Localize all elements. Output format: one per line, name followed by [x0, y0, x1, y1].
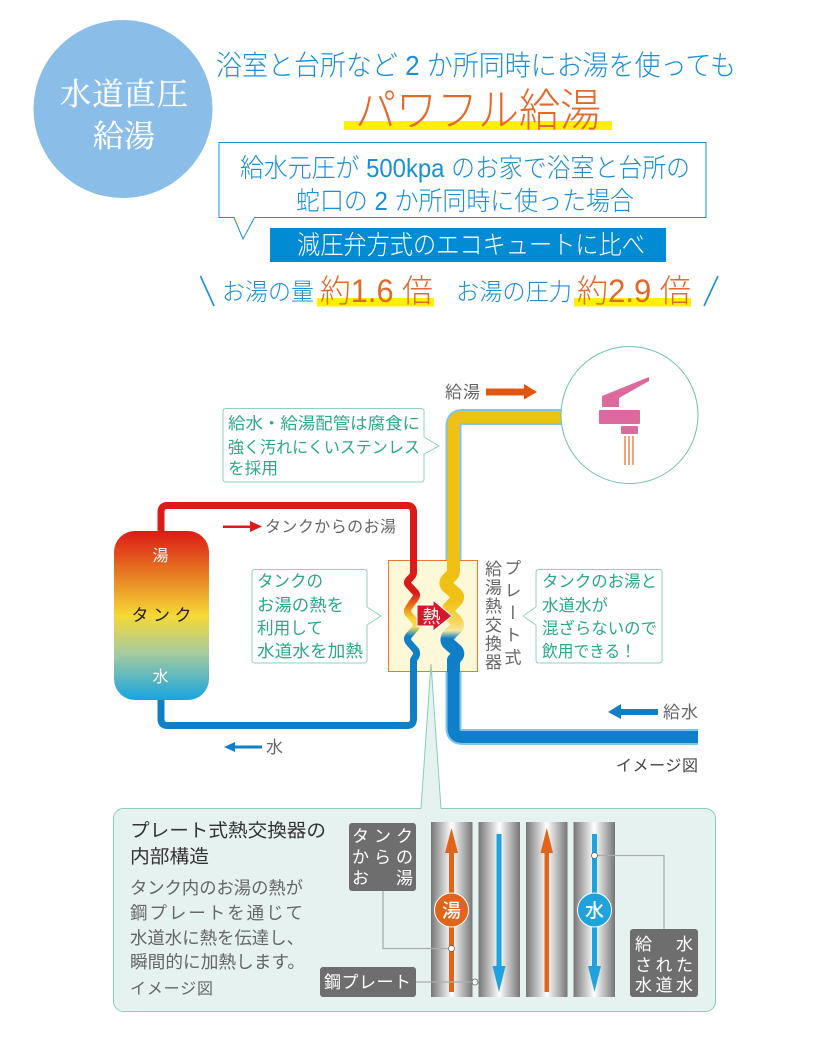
label: プレート式給湯熱交換器	[482, 559, 521, 672]
panel description: 水道水に熱を伝達し、	[130, 928, 304, 948]
panel: plate heat exchanger internals	[114, 664, 716, 1012]
callout: stainless pipes: を採用	[228, 459, 278, 478]
tag: 給水された水道水: 水道水	[635, 976, 693, 995]
leader dots	[448, 852, 598, 985]
marker: 水	[578, 893, 612, 927]
callout: drinkable	[523, 570, 662, 663]
callout: stainless pipes	[223, 408, 439, 482]
panel description: タンク内のお湯の熱が	[130, 878, 303, 898]
tag: タンクからのお湯	[349, 823, 416, 891]
tank: 湯	[152, 547, 169, 565]
callout: tank heat	[252, 570, 381, 663]
marker: 湯: 湯	[442, 900, 461, 922]
arrow: hot up 1	[445, 828, 458, 992]
arrow: hot up 2	[540, 828, 553, 992]
tag: 給水された水道水	[630, 929, 698, 997]
tag: 鋼プレート: 鋼プレート	[324, 973, 411, 992]
panel description: 鋼プレートを通じて	[130, 903, 303, 923]
arrow: water down 1	[492, 834, 506, 992]
label: プレート式給湯熱交換器: プレート式	[502, 559, 521, 671]
arrow: water down 2	[588, 834, 601, 992]
panel heading: 内部構造	[130, 846, 209, 867]
badge: 水道直圧給湯: 水道直圧	[60, 77, 188, 112]
tank: 水	[152, 668, 169, 686]
tag: 鋼プレート	[320, 967, 416, 997]
callout: drinkable: 混ざらないので	[542, 618, 657, 638]
leader lines	[383, 856, 664, 982]
pipe: blue supply water	[454, 672, 698, 737]
pipe: blue water to tank	[161, 670, 414, 726]
callout: stainless pipes: 給水・給湯配管は腐食に	[228, 414, 420, 433]
banner: comparison: 減圧弁方式のエコキュートに比べ	[297, 230, 645, 260]
label: 水 with arrow: 水	[266, 738, 283, 757]
pipe: hot supply to faucet	[454, 417, 570, 562]
panel description	[130, 878, 305, 998]
tag: タンクからのお湯: お 湯	[352, 869, 413, 888]
label: 給湯 with arrow	[445, 383, 537, 402]
callout: tank heat: 水道水を加熱	[257, 642, 363, 661]
tag: 給水された水道水: された	[635, 956, 693, 975]
label: 水 with arrow	[224, 738, 283, 757]
tank: タンク	[132, 606, 192, 625]
callout: drinkable: タンクのお湯と	[542, 572, 657, 591]
callout: tank heat: お湯の熱を	[257, 596, 344, 615]
tag: 給水された水道水: 給 水	[635, 935, 693, 954]
heading: パワフル給湯: パワフル給湯	[355, 85, 601, 136]
callout: drinkable: 飲用できる！	[542, 642, 636, 661]
heat exchanger: 熱	[422, 607, 440, 627]
result: hot water amount and pressure: お湯の量	[222, 279, 314, 306]
panel heading	[130, 820, 326, 867]
pipe: red hot water from tank	[161, 506, 414, 562]
caption: イメージ図: イメージ図	[616, 758, 698, 775]
result: hot water amount and pressure: 約1.6 倍	[320, 273, 433, 309]
result: hot water amount and pressure: 約2.9 倍	[577, 273, 691, 309]
tag: タンクからのお湯: タンク	[352, 827, 413, 846]
label: 給湯 with arrow: 給湯	[445, 383, 480, 402]
label: 給水 with arrow: 給水	[663, 703, 698, 722]
badge: 水道直圧給湯: 給湯	[93, 119, 155, 154]
label: プレート式給湯熱交換器: 給湯熱交換器	[482, 560, 502, 672]
badge: 水道直圧給湯	[34, 20, 212, 198]
speech bubble: conditions	[219, 142, 706, 239]
marker: 湯	[434, 893, 468, 927]
plates	[431, 822, 615, 997]
label: タンクからのお湯 with arrow: タンクからのお湯	[265, 518, 396, 536]
heat exchanger	[388, 558, 478, 674]
label: 給水 with arrow	[608, 703, 698, 722]
result: hot water amount and pressure	[200, 273, 718, 309]
tag: タンクからのお湯: からの	[352, 848, 413, 867]
panel heading: プレート式熱交換器の	[130, 820, 326, 841]
callout: tank heat: タンクの	[257, 572, 323, 591]
panel description: 瞬間的に加熱します。	[130, 952, 305, 972]
tank	[114, 531, 209, 700]
faucet circle	[561, 346, 698, 484]
callout: stainless pipes: 強く汚れにくいステンレス	[228, 438, 420, 457]
speech bubble: conditions: 蛇口の 2 か所同時に使った場合	[296, 186, 634, 216]
callout: tank heat: 利用して	[257, 619, 323, 638]
heading: subtitle: 浴室と台所など 2 か所同時にお湯を使っても	[216, 50, 736, 81]
marker: 水: 水	[585, 900, 604, 922]
speech bubble: conditions: 給水元圧が 500kpa のお家で浴室と台所の	[240, 153, 690, 183]
result: hot water amount and pressure: お湯の圧力	[456, 279, 572, 306]
callout: drinkable: 水道水が	[542, 596, 608, 615]
panel description: イメージ図	[130, 981, 213, 998]
